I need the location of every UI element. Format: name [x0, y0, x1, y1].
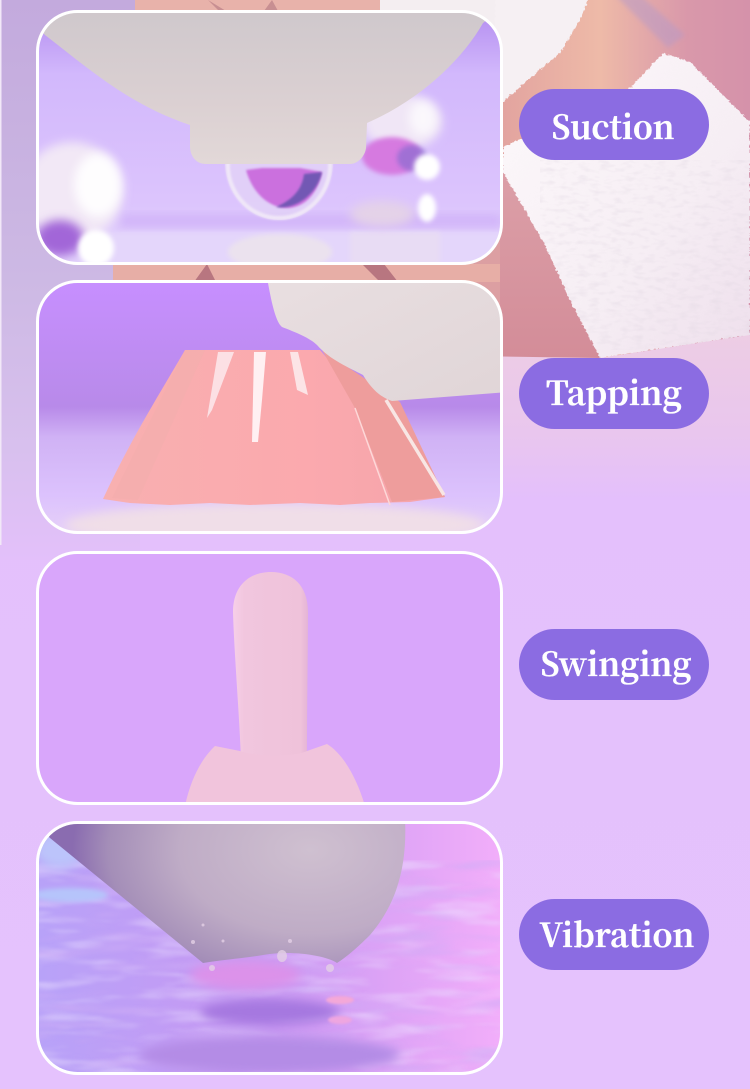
panel: swinging	[37, 552, 502, 806]
left blurred ball	[39, 138, 128, 262]
right blurred ball	[362, 94, 442, 180]
panel border	[38, 552, 502, 804]
water droplets	[191, 924, 334, 972]
device head	[30, 818, 405, 963]
device with swinging arm	[185, 572, 365, 806]
jelly	[103, 350, 445, 505]
floor sheen	[68, 503, 481, 531]
panel border	[38, 12, 502, 264]
water ripples	[32, 832, 502, 1074]
panel border	[38, 822, 502, 1074]
panel border	[38, 282, 502, 532]
device head	[20, 10, 500, 164]
panel: tapping	[37, 278, 508, 547]
label: Swinging: Swinging	[540, 639, 692, 686]
label: Tapping	[519, 358, 709, 429]
panel: suction	[39, 13, 500, 262]
device head	[262, 278, 508, 401]
towel: large fold	[503, 53, 750, 358]
label: Tapping: Tapping	[546, 368, 682, 415]
background photo: hands and towel	[0, 0, 750, 560]
floor reflection	[111, 192, 500, 262]
label: Swinging	[519, 629, 709, 700]
label: Vibration	[519, 899, 709, 970]
panel: vibration	[30, 818, 502, 1074]
label: Suction: Suction	[552, 102, 674, 149]
label: Vibration: Vibration	[540, 910, 694, 957]
towel: upper left fold	[495, 0, 590, 102]
skin: lower fold	[500, 165, 605, 362]
towel: lower lavender band	[470, 335, 750, 500]
label: Suction	[519, 89, 709, 160]
centre glass ball	[225, 160, 333, 220]
